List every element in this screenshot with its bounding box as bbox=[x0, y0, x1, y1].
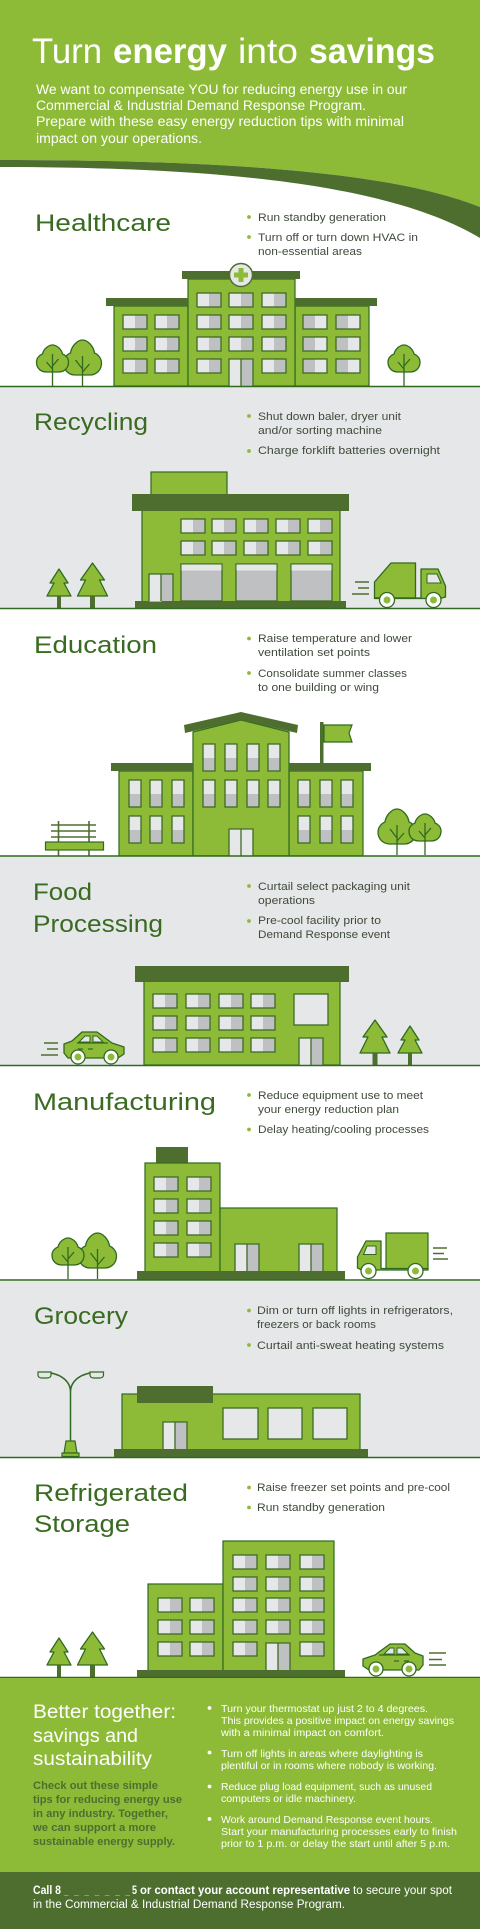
icon: delivery truck bbox=[358, 1233, 448, 1278]
tips: manufacturing: Delay heating/cooling processes bbox=[258, 1124, 430, 1136]
icon: car bbox=[363, 1644, 446, 1676]
heading: better together bbox=[33, 1702, 176, 1770]
heading: better together: sustainability bbox=[33, 1749, 153, 1770]
paragraph: we can support a more bbox=[32, 1822, 156, 1834]
tips: grocery: Curtail anti-sweat heating systems bbox=[257, 1340, 445, 1352]
panel: education bbox=[34, 632, 441, 856]
title: into bbox=[238, 32, 298, 71]
contact text: to secure your spot bbox=[353, 1885, 453, 1897]
tips list: Start your manufacturing processes early to finish bbox=[221, 1826, 457, 1838]
tips: grocery: freezers or back rooms bbox=[257, 1319, 377, 1331]
school building bbox=[111, 712, 371, 856]
tips: food processing: operations bbox=[258, 895, 316, 907]
tips: recycling: Shut down baler, dryer unit bbox=[258, 411, 401, 423]
panel: healthcare bbox=[35, 210, 420, 386]
heading: manufacturing: Manufacturing bbox=[33, 1089, 216, 1116]
heading: healthcare: Healthcare bbox=[35, 210, 171, 237]
paragraph: tips for reducing energy use bbox=[33, 1794, 182, 1806]
tips: food processing: Curtail select packaging unit bbox=[258, 881, 410, 893]
tips: education: ventilation set points bbox=[258, 647, 371, 659]
contact text: _ _ _ _ _ _ _ bbox=[63, 1887, 131, 1896]
tips list: computers or idle machinery. bbox=[221, 1793, 356, 1805]
tips: healthcare: Run standby generation bbox=[258, 212, 386, 224]
heading: better together: Better together: bbox=[33, 1702, 176, 1723]
tips list bbox=[208, 1703, 457, 1850]
tips list: Turn your thermostat up just 2 to 4 degrees. bbox=[221, 1703, 428, 1715]
icon: flag bbox=[320, 722, 352, 763]
food plant building bbox=[135, 966, 349, 1065]
paragraph: sustainable energy supply. bbox=[33, 1836, 175, 1848]
intro text: impact on your operations. bbox=[36, 131, 202, 146]
title: savings bbox=[309, 32, 435, 71]
heading: refrigerated storage: Refrigerated bbox=[34, 1480, 188, 1507]
tips: education: Raise temperature and lower bbox=[258, 633, 412, 645]
grocery store building bbox=[114, 1386, 368, 1457]
tips: healthcare: non-essential areas bbox=[258, 246, 363, 258]
intro text bbox=[36, 82, 408, 146]
tips list: This provides a positive impact on energy savings bbox=[221, 1715, 454, 1727]
heading: education: Education bbox=[34, 632, 157, 659]
panel: food processing bbox=[0, 856, 480, 1066]
tips: education: Consolidate summer classes bbox=[258, 668, 408, 680]
icon: street lamp bbox=[38, 1372, 104, 1456]
icon: trees left bbox=[36, 340, 102, 386]
tips: recycling: Charge forklift batteries overnight bbox=[258, 445, 440, 457]
icon: recycling truck bbox=[352, 563, 446, 608]
tips: food processing bbox=[247, 881, 410, 941]
intro text: We want to compensate YOU for reducing energy use in our bbox=[36, 82, 408, 97]
cold storage building bbox=[137, 1541, 345, 1678]
ground lines bbox=[0, 386, 480, 1678]
title: energy bbox=[113, 32, 228, 71]
tips list: prior to 1 p.m. or delay the start until after 5 p.m. bbox=[221, 1838, 450, 1850]
heading: recycling: Recycling bbox=[34, 409, 148, 436]
icon: trees right bbox=[378, 809, 441, 855]
factory building bbox=[137, 1147, 345, 1280]
icon: tree right bbox=[388, 345, 420, 386]
tips: manufacturing: your energy reduction plan bbox=[258, 1104, 399, 1116]
icon: pine trees bbox=[47, 563, 108, 608]
icon: car bbox=[41, 1032, 124, 1064]
intro text: Prepare with these easy energy reduction tips with minimal bbox=[36, 114, 404, 129]
tips: food processing: Demand Response event bbox=[258, 929, 390, 941]
icon: pine trees bbox=[47, 1632, 108, 1677]
tips: manufacturing bbox=[247, 1090, 430, 1136]
header panel bbox=[0, 0, 480, 238]
paragraph bbox=[32, 1780, 182, 1848]
panel: grocery bbox=[0, 1281, 480, 1458]
heading: grocery: Grocery bbox=[34, 1303, 128, 1330]
icon: bench bbox=[46, 821, 104, 856]
panel: recycling bbox=[0, 387, 480, 609]
tips: education bbox=[247, 633, 412, 694]
contact text: Call 8 bbox=[33, 1885, 62, 1897]
tips: manufacturing: Reduce equipment use to meet bbox=[258, 1090, 423, 1102]
tips list: plentiful or in rooms where nobody is working. bbox=[221, 1760, 437, 1772]
heading: better together: savings and bbox=[33, 1726, 138, 1747]
panel: refrigerated storage bbox=[34, 1480, 450, 1678]
paragraph: Check out these simple bbox=[33, 1780, 158, 1792]
heading: food processing: Food bbox=[33, 879, 92, 906]
paragraph: in any industry. Together, bbox=[33, 1808, 168, 1820]
icon: pine trees bbox=[360, 1020, 422, 1065]
tips: refrigerated storage: Run standby generation bbox=[257, 1502, 385, 1514]
tips: education: to one building or wing bbox=[258, 682, 379, 694]
heading: refrigerated storage bbox=[34, 1480, 188, 1538]
tips: recycling bbox=[247, 411, 440, 457]
tips: refrigerated storage bbox=[247, 1482, 450, 1514]
contact text bbox=[33, 1885, 453, 1911]
tips: grocery bbox=[247, 1305, 453, 1352]
panel: better together bbox=[0, 1678, 480, 1872]
contact text: or contact your account representative bbox=[140, 1885, 350, 1897]
heading: food processing: Processing bbox=[33, 911, 163, 938]
heading: food processing bbox=[33, 879, 163, 938]
intro text: Commercial & Industrial Demand Response Program. bbox=[36, 98, 366, 113]
icon: medical cross bbox=[230, 264, 252, 286]
tips list: Work around Demand Response event hours. bbox=[221, 1814, 433, 1826]
icon: trees left bbox=[52, 1233, 116, 1279]
contact text: 5 bbox=[132, 1885, 137, 1897]
heading: refrigerated storage: Storage bbox=[34, 1511, 130, 1538]
tips: healthcare: Turn off or turn down HVAC in bbox=[258, 232, 418, 244]
tips: food processing: Pre-cool facility prior to bbox=[258, 915, 381, 927]
tips list: Turn off lights in areas where daylighting is bbox=[221, 1748, 423, 1760]
title: Turn bbox=[32, 32, 102, 71]
recycling plant building bbox=[132, 472, 349, 609]
contact text: in the Commercial & Industrial Demand Response Program. bbox=[33, 1899, 345, 1911]
tips list: with a minimal impact on comfort. bbox=[220, 1727, 384, 1739]
tips: recycling: and/or sorting machine bbox=[258, 425, 382, 437]
tips list: Reduce plug load equipment, such as unused bbox=[221, 1781, 432, 1793]
tips: refrigerated storage: Raise freezer set points and pre-cool bbox=[257, 1482, 450, 1494]
tips: healthcare bbox=[247, 212, 418, 258]
hospital building bbox=[106, 264, 377, 386]
panel: call to action bbox=[0, 1872, 480, 1929]
tips: grocery: Dim or turn off lights in refrigerators, bbox=[257, 1305, 453, 1317]
panel: manufacturing bbox=[33, 1089, 448, 1280]
